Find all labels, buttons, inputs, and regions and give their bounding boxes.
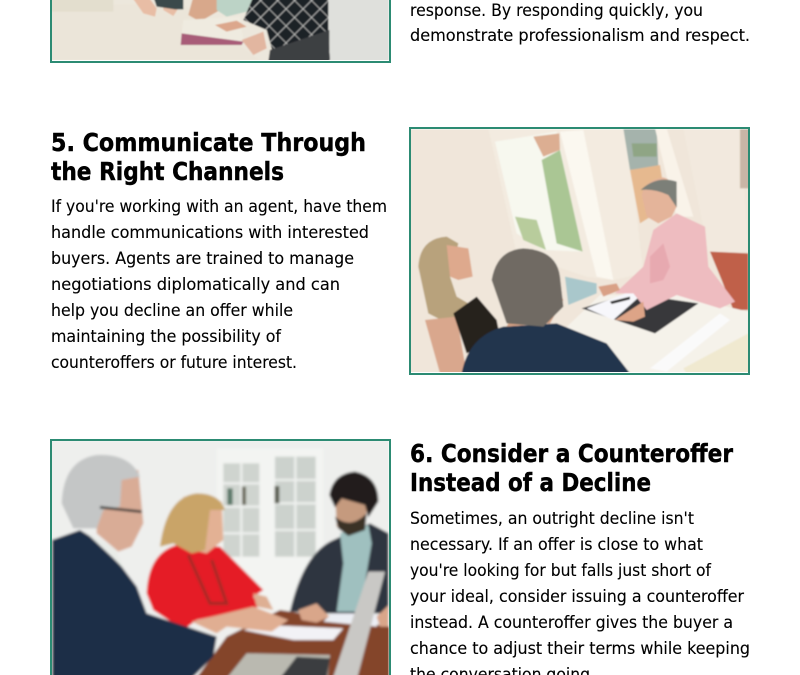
heading: tip 6: 6. Consider a Counteroffer [410,439,734,468]
heading: tip 5: 5. Communicate Through [51,128,366,157]
text block: tip 4 ending [410,1,750,45]
text block: tip 6 body: instead. A counteroffer gives the buyer a [410,613,733,632]
heading: tip 5: the Right Channels [51,157,284,186]
text block: tip 4 ending: response. By responding quickly, you [410,1,703,20]
text block: tip 5 body: counteroffers or future interest. [51,353,297,372]
photo: three people at wooden table [50,440,390,675]
text block: tip 5 body: negotiations diplomatically and can [51,275,340,294]
text block: tip 6 body: your ideal, consider issuing a counteroffer [410,587,744,606]
text block: tip 6 body [410,509,750,675]
text block: tip 4 ending: demonstrate professionalism and respect. [410,26,750,45]
text block: tip 6 body: necessary. If an offer is close to what [410,535,704,554]
photo: team reviewing document at table [50,0,390,63]
text block: tip 5 body: If you're working with an agent, have them [51,197,387,216]
heading: tip 5 [51,128,366,186]
text block: tip 5 body: maintaining the possibility of [51,327,282,346]
text block: tip 5 body [51,197,387,372]
text block: tip 6 body: you're looking for but falls just short of [410,561,712,580]
text block: tip 5 body: help you decline an offer while [51,301,293,320]
text block: tip 5 body: handle communications with interested [51,223,369,242]
photo: agent meeting with couple [410,128,750,374]
text block: tip 6 body: chance to adjust their terms while keeping [410,639,750,658]
text block: tip 6 body: Sometimes, an outright decline isn't [410,509,695,528]
heading: tip 6: Instead of a Decline [410,468,651,497]
text block: tip 5 body: buyers. Agents are trained to manage [51,249,354,268]
heading: tip 6 [410,439,734,497]
